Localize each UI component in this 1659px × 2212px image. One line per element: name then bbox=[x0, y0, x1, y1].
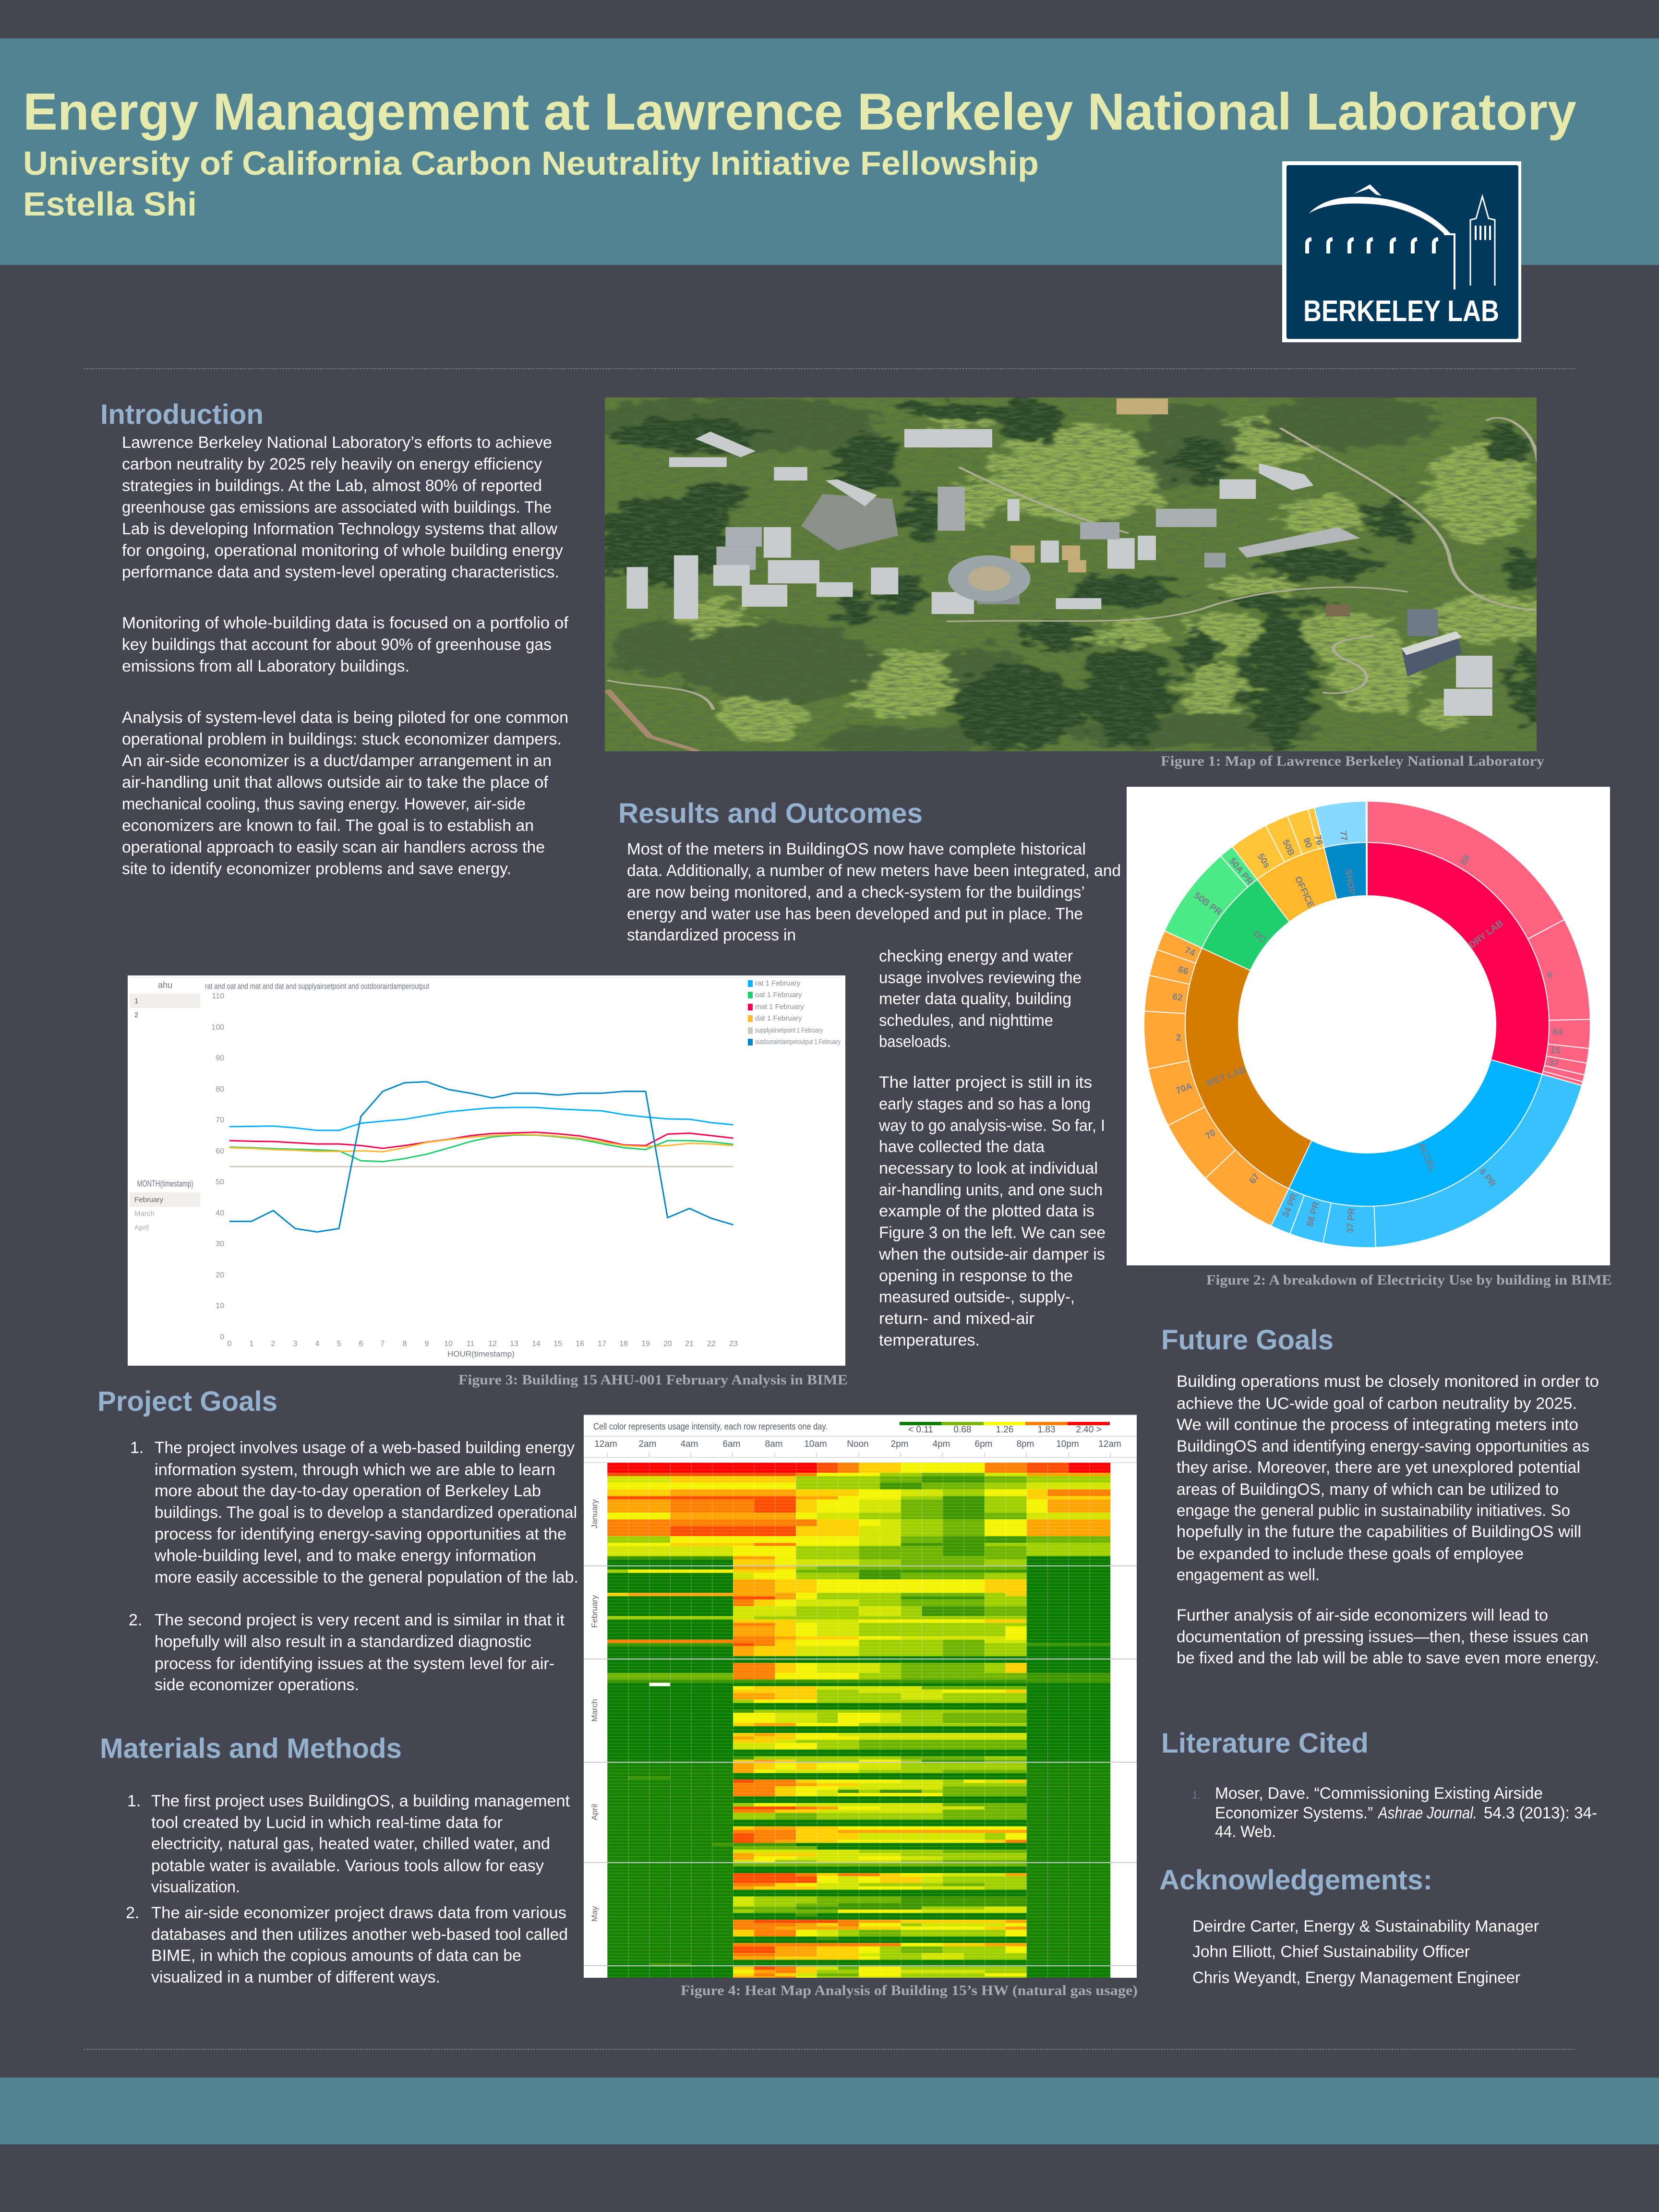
time axis: 4pm bbox=[933, 1439, 950, 1449]
ring labels: 62 bbox=[1172, 992, 1183, 1003]
text block: results continued bbox=[878, 947, 1106, 1349]
legend: mat 1 February bbox=[755, 1003, 804, 1011]
x axis labels: 11 bbox=[467, 1340, 474, 1348]
x axis labels: 23 bbox=[729, 1340, 738, 1348]
text block: results continued: have collected the data bbox=[879, 1138, 1045, 1156]
x axis labels: 19 bbox=[641, 1340, 650, 1348]
month labels: April bbox=[590, 1804, 599, 1820]
text block: introduction: Lawrence Berkeley National Laboratory’s efforts to achieve bbox=[122, 433, 552, 452]
ring labels: 90 bbox=[1301, 837, 1314, 849]
ring labels: 67 bbox=[1248, 1172, 1262, 1186]
citation: 54.3 (2013): 34- bbox=[1484, 1804, 1597, 1822]
text block: results continued: baseloads. bbox=[879, 1033, 951, 1051]
citation: 1. bbox=[1192, 1789, 1201, 1801]
ring labels: 88 PR bbox=[1305, 1201, 1322, 1228]
filter: ahu: 2 bbox=[134, 1011, 138, 1019]
y axis labels: 100 bbox=[211, 1023, 224, 1032]
heading: Acknowledgements: Acknowledgements: bbox=[1159, 1864, 1432, 1896]
legend: rat 1 February bbox=[755, 979, 801, 987]
list: materials and methods: The air-side economizer project draws data from various bbox=[151, 1904, 566, 1922]
x axis labels: 5 bbox=[337, 1340, 341, 1348]
list: project goals: 1. bbox=[130, 1439, 144, 1457]
ring labels: 50B bbox=[1280, 838, 1297, 857]
figure 2: sunburst of electricity use bbox=[1083, 741, 1651, 1308]
list: materials and methods: The first project uses BuildingOS, a building management bbox=[151, 1792, 570, 1810]
ring labels: WET LAB bbox=[1205, 1065, 1247, 1089]
text block: future goals: Further analysis of air-side economizers will lead to bbox=[1177, 1606, 1548, 1624]
list: project goals: more easily accessible to the general population of the lab. bbox=[155, 1568, 578, 1587]
logo: Berkeley Lab bbox=[1282, 161, 1521, 342]
ring labels: 76 bbox=[1312, 834, 1324, 846]
citation bbox=[1192, 1784, 1597, 1841]
list: project goals: process for identifying issues at the system level for air- bbox=[155, 1655, 554, 1673]
text block: introduction: performance data and system-level operating characteristics. bbox=[122, 563, 559, 581]
text block: introduction: operational problem in buildings: stuck economizer dampers. bbox=[122, 730, 562, 748]
text block: results continued: schedules, and nighttime bbox=[879, 1011, 1053, 1030]
text block: future goals: documentation of pressing issues—then, these issues can bbox=[1177, 1628, 1588, 1646]
legend: oat 1 February bbox=[755, 991, 802, 999]
heat map cells bbox=[607, 1463, 1110, 1978]
logo: Berkeley Lab: BERKELEY LAB bbox=[1303, 295, 1499, 328]
text block: results continued: meter data quality, building bbox=[879, 990, 1071, 1008]
list: materials and methods: electricity, natural gas, heated water, chilled water, and bbox=[151, 1835, 550, 1853]
text block: introduction: site to identify economizer problems and save energy. bbox=[122, 860, 511, 878]
text block: results continued: when the outside-air damper is bbox=[878, 1245, 1105, 1263]
text block: introduction: economizers are known to fail. The goal is to establish an bbox=[122, 817, 534, 835]
caption: figure 2: Figure 2: A breakdown of Electricity Use by building in BIME bbox=[1206, 1272, 1612, 1288]
time axis bbox=[594, 1439, 1121, 1449]
ring labels: 77 bbox=[1337, 830, 1349, 842]
text block: future goals: areas of BuildingOS, many of which can be utilized to bbox=[1177, 1480, 1559, 1499]
ring labels: SHOP bbox=[1343, 868, 1357, 895]
list: materials and methods: 1. bbox=[127, 1792, 141, 1810]
y axis labels: 60 bbox=[216, 1147, 224, 1155]
y axis labels bbox=[211, 992, 224, 1341]
data lines bbox=[229, 1082, 733, 1232]
caption: figure 1: Figure 1: Map of Lawrence Berkeley National Laboratory bbox=[1161, 753, 1544, 769]
list: materials and methods: visualized in a number of different ways. bbox=[151, 1968, 440, 1986]
outer ring: buildings bbox=[1083, 741, 1651, 1308]
top banner bbox=[0, 38, 1659, 265]
list: project goals: buildings. The goal is to develop a standardized operational bbox=[155, 1503, 577, 1522]
text block: future goals bbox=[1177, 1372, 1599, 1667]
text block: results continued: early stages and so has a long bbox=[879, 1095, 1091, 1113]
text block: results: data. Additionally, a number of new meters have been integrated, and bbox=[627, 862, 1121, 880]
heading: Project Goals: Project Goals bbox=[97, 1386, 277, 1417]
text block: results continued: Figure 3 on the left. We can see bbox=[879, 1224, 1106, 1242]
list: project goals: The second project is very recent and is similar in that it bbox=[155, 1611, 565, 1629]
figure 3: line chart bbox=[128, 975, 845, 1366]
ring labels: 34 PR bbox=[1280, 1192, 1299, 1219]
heat map legend bbox=[900, 1422, 1110, 1435]
time axis: 6am bbox=[723, 1439, 740, 1449]
text block: results continued: opening in response to the bbox=[879, 1267, 1073, 1285]
ring labels: 37 PR bbox=[1345, 1207, 1357, 1234]
time axis: 10pm bbox=[1056, 1439, 1079, 1449]
filter: month: April bbox=[134, 1224, 149, 1232]
title: Energy Management at Lawrence Berkeley National Laboratory bbox=[23, 83, 1576, 141]
time axis: 8am bbox=[765, 1439, 782, 1449]
ring labels: 50B PR bbox=[1192, 890, 1224, 918]
x axis labels: 12 bbox=[488, 1340, 497, 1348]
text block: future goals: be expanded to include these goals of employee bbox=[1177, 1545, 1524, 1563]
y axis labels: 40 bbox=[216, 1209, 224, 1217]
x axis labels: 21 bbox=[685, 1340, 694, 1348]
list: project goals: process for identifying energy-saving opportunities at the bbox=[155, 1525, 566, 1543]
filter: month bbox=[130, 1179, 200, 1232]
legend: dat 1 February bbox=[755, 1014, 802, 1022]
x axis labels: 10 bbox=[444, 1340, 453, 1348]
x axis labels bbox=[228, 1340, 738, 1358]
ring labels: 70A bbox=[1175, 1081, 1194, 1096]
text block: results continued: temperatures. bbox=[879, 1331, 980, 1349]
text block: introduction: carbon neutrality by 2025 rely heavily on energy efficiency bbox=[122, 455, 542, 473]
text block: results continued: necessary to look at individual bbox=[879, 1159, 1098, 1178]
y axis labels: 70 bbox=[216, 1116, 224, 1124]
heading: Results and Outcomes: Results and Outcomes bbox=[618, 798, 923, 829]
text block: results continued: usage involves reviewing the bbox=[879, 969, 1082, 987]
filter: month: March bbox=[134, 1210, 155, 1218]
ring labels: 37 bbox=[1548, 1057, 1560, 1069]
text block: introduction: strategies in buildings. At the Lab, almost 80% of reported bbox=[122, 477, 542, 495]
text block: introduction: greenhouse gas emissions are associated with buildings. The bbox=[122, 498, 552, 517]
list: project goals: information system, through which we are able to learn bbox=[155, 1461, 555, 1479]
x axis labels: 17 bbox=[598, 1340, 606, 1348]
month labels: May bbox=[590, 1906, 599, 1922]
author: Estella Shi bbox=[23, 185, 197, 223]
x axis labels: 22 bbox=[707, 1340, 716, 1348]
text block: results continued: The latter project is still in its bbox=[879, 1073, 1092, 1092]
text block: acknowledgements: Chris Weyandt, Energy Management Engineer bbox=[1192, 1969, 1520, 1987]
ring labels: DRY LAB bbox=[1467, 918, 1505, 950]
legend bbox=[748, 979, 841, 1046]
list: project goals bbox=[129, 1439, 578, 1694]
ring labels: 84 bbox=[1552, 1027, 1563, 1037]
ring labels: 50s bbox=[1255, 852, 1272, 870]
time axis: 4am bbox=[681, 1439, 698, 1449]
ring labels: 70 bbox=[1203, 1128, 1217, 1142]
text block: results continued: checking energy and water bbox=[879, 947, 1073, 965]
list: materials and methods: 2. bbox=[126, 1904, 139, 1922]
text block: results: standardized process in bbox=[627, 926, 796, 944]
x axis labels: 4 bbox=[315, 1340, 320, 1348]
x axis labels: 2 bbox=[271, 1340, 276, 1348]
text block: future goals: engage the general public in sustainability initiatives. So bbox=[1177, 1502, 1570, 1520]
x axis labels: 20 bbox=[663, 1340, 672, 1348]
heat map legend: < 0.11 bbox=[908, 1425, 933, 1435]
time axis: 12am bbox=[1098, 1439, 1121, 1449]
text block: introduction: for ongoing, operational monitoring of whole building energy bbox=[122, 541, 563, 560]
time axis: 8pm bbox=[1017, 1439, 1034, 1449]
text block: future goals: they arise. Moreover, there are yet unexplored potential bbox=[1177, 1458, 1580, 1477]
citation: Moser, Dave. “Commissioning Existing Airside bbox=[1215, 1784, 1543, 1803]
x axis labels: 13 bbox=[510, 1340, 518, 1348]
list: materials and methods: tool created by Lucid in which real-time data for bbox=[151, 1814, 503, 1832]
month labels: January bbox=[590, 1499, 599, 1528]
heat map caption: Cell color represents usage intensity, each row represents one day. bbox=[593, 1422, 828, 1432]
text block: future goals: We will continue the process of integrating meters into bbox=[1177, 1416, 1578, 1434]
text block: acknowledgements: John Elliott, Chief Sustainability Officer bbox=[1192, 1943, 1470, 1961]
text block: introduction: key buildings that account for about 90% of greenhouse gas bbox=[122, 636, 552, 654]
list: materials and methods: visualization. bbox=[151, 1878, 240, 1896]
text block: acknowledgements bbox=[1192, 1917, 1539, 1987]
ring labels: OFFICE bbox=[1293, 875, 1316, 909]
chart title: rat and oat and mat and dat and supplyairsetpoint and outdoorairdamperoutput bbox=[205, 982, 429, 991]
filter: ahu: 1 bbox=[134, 997, 138, 1005]
x axis labels: HOUR(timestamp) bbox=[447, 1349, 515, 1358]
time axis: 10am bbox=[804, 1439, 827, 1449]
list: project goals: side economizer operations. bbox=[155, 1676, 359, 1694]
text block: results continued: example of the plotted data is bbox=[879, 1202, 1094, 1220]
x axis labels: 8 bbox=[403, 1340, 407, 1348]
ring labels: 88 bbox=[1459, 853, 1473, 867]
heat map legend: 2.40 > bbox=[1076, 1425, 1102, 1435]
bottom banner bbox=[0, 2078, 1659, 2144]
y axis labels: 80 bbox=[216, 1085, 224, 1094]
month labels bbox=[590, 1499, 599, 1922]
y axis labels: 10 bbox=[216, 1302, 224, 1310]
text block: results: Most of the meters in BuildingOS now have complete historical bbox=[627, 840, 1086, 858]
caption: figure 3: Figure 3: Building 15 AHU-001 February Analysis in BIME bbox=[458, 1372, 848, 1388]
text block: introduction: operational approach to easily scan air handlers across the bbox=[122, 838, 545, 856]
y axis labels: 50 bbox=[216, 1178, 224, 1186]
time axis: 12am bbox=[594, 1439, 617, 1449]
x axis labels: 3 bbox=[293, 1340, 298, 1348]
y axis labels: 20 bbox=[216, 1271, 224, 1279]
text block: introduction: mechanical cooling, thus saving energy. However, air-side bbox=[122, 795, 526, 813]
figure 1: aerial photo of the laboratory bbox=[589, 394, 1553, 756]
ring labels: 15 bbox=[1550, 1045, 1562, 1057]
list: project goals: whole-building level, and to make energy information bbox=[154, 1547, 536, 1565]
x axis labels: 6 bbox=[359, 1340, 363, 1348]
time axis: Noon bbox=[847, 1439, 869, 1449]
heading: Literature Cited: Literature Cited bbox=[1161, 1728, 1369, 1759]
text block: future goals: engagement as well. bbox=[1177, 1566, 1320, 1584]
text block: results continued: air-handling units, and one such bbox=[879, 1181, 1103, 1199]
heat map legend: 1.26 bbox=[996, 1425, 1013, 1435]
month labels: February bbox=[590, 1595, 599, 1628]
text block: future goals: Building operations must be closely monitored in order to bbox=[1177, 1372, 1599, 1391]
text block: future goals: BuildingOS and identifying energy-saving opportunities as bbox=[1177, 1437, 1589, 1455]
list: materials and methods: BIME, in which the copious amounts of data can be bbox=[151, 1947, 521, 1965]
y axis labels: 90 bbox=[216, 1054, 224, 1062]
month labels: March bbox=[590, 1699, 599, 1722]
text block: results: energy and water use has been developed and put in place. The bbox=[627, 905, 1083, 923]
text block: results continued: return- and mixed-air bbox=[879, 1310, 1034, 1328]
x axis labels: 15 bbox=[553, 1340, 562, 1348]
y axis labels: 30 bbox=[216, 1240, 224, 1248]
text block: introduction: Lab is developing Information Technology systems that allow bbox=[122, 520, 557, 538]
heading: Materials and Methods: Materials and Methods bbox=[100, 1733, 402, 1764]
ring labels: 50A PR bbox=[1227, 856, 1255, 887]
legend: supplyairsetpoint 1 February bbox=[755, 1026, 823, 1034]
citation: 44. Web. bbox=[1215, 1823, 1276, 1841]
text block: introduction: Monitoring of whole-building data is focused on a portfolio of bbox=[122, 614, 569, 632]
citation: Ashrae Journal. bbox=[1377, 1804, 1477, 1822]
filter: month: February bbox=[134, 1196, 164, 1204]
heat map legend: 1.83 bbox=[1038, 1425, 1055, 1435]
x axis labels: 1 bbox=[250, 1340, 254, 1348]
subtitle: University of California Carbon Neutrality Initiative Fellowship bbox=[23, 144, 1039, 182]
time axis: 2pm bbox=[891, 1439, 908, 1449]
list: materials and methods: potable water is available. Various tools allow for easy bbox=[151, 1857, 544, 1875]
filter: ahu: ahu bbox=[158, 980, 172, 990]
text block: introduction: air-handling unit that allows outside air to take the place of bbox=[122, 773, 549, 792]
text block: introduction: An air-side economizer is a duct/damper arrangement in an bbox=[122, 752, 552, 770]
time axis: 2am bbox=[639, 1439, 656, 1449]
figure 4: heat map bbox=[584, 1415, 1137, 1980]
y axis labels: 110 bbox=[212, 992, 224, 1000]
ring labels: DC bbox=[1251, 929, 1268, 945]
text block: introduction bbox=[122, 433, 569, 878]
x axis labels: 18 bbox=[619, 1340, 628, 1348]
ring labels: 2 bbox=[1176, 1033, 1181, 1043]
ring labels: 6 PR bbox=[1477, 1167, 1498, 1189]
text block: results continued: way to go analysis-wise. So far, I bbox=[878, 1117, 1105, 1135]
text block: acknowledgements: Deirdre Carter, Energy & Sustainability Manager bbox=[1192, 1917, 1539, 1936]
text block: introduction: Analysis of system-level data is being piloted for one common bbox=[122, 709, 568, 727]
time axis: 6pm bbox=[975, 1439, 992, 1449]
list: project goals: The project involves usage of a web-based building energy bbox=[155, 1439, 575, 1457]
x axis labels: 7 bbox=[381, 1340, 385, 1348]
heat map legend: 0.68 bbox=[954, 1425, 971, 1435]
text block: results continued: measured outside-, supply-, bbox=[879, 1288, 1075, 1306]
heading: Future Goals: Future Goals bbox=[1161, 1324, 1334, 1356]
text block: results bbox=[627, 840, 1121, 944]
list: project goals: 2. bbox=[129, 1611, 142, 1629]
text block: introduction: emissions from all Laboratory buildings. bbox=[122, 657, 409, 675]
inner ring: building types bbox=[1149, 806, 1585, 1242]
x axis labels: 16 bbox=[576, 1340, 584, 1348]
y axis labels: 0 bbox=[220, 1333, 224, 1341]
ring labels: 66 bbox=[1177, 964, 1190, 977]
heading: Introduction: Introduction bbox=[100, 399, 264, 430]
filter: month: MONTH(timestamp) bbox=[137, 1179, 193, 1189]
x axis labels: 14 bbox=[532, 1340, 541, 1348]
text block: results: are now being monitored, and a check-system for the buildings’ bbox=[627, 883, 1085, 902]
text block: future goals: achieve the UC-wide goal of carbon neutrality by 2025. bbox=[1177, 1395, 1577, 1413]
ring labels: 6 bbox=[1546, 970, 1553, 981]
list: project goals: hopefully will also result in a standardized diagnostic bbox=[155, 1633, 531, 1651]
ring labels bbox=[1172, 830, 1563, 1234]
x axis labels: 0 bbox=[228, 1340, 232, 1348]
text block: future goals: hopefully in the future the capabilities of BuildingOS will bbox=[1177, 1523, 1581, 1541]
x axis labels: 9 bbox=[425, 1340, 429, 1348]
legend: outdoorairdamperoutput 1 February bbox=[755, 1038, 841, 1046]
caption: figure 4: Figure 4: Heat Map Analysis of Building 15’s HW (natural gas usage) bbox=[681, 1983, 1138, 1998]
list: materials and methods: databases and then utilizes another web-based tool called bbox=[151, 1925, 568, 1944]
text block: future goals: be fixed and the lab will be able to save even more energy. bbox=[1177, 1649, 1599, 1667]
ring labels: 74 bbox=[1183, 945, 1197, 959]
citation: Economizer Systems.” bbox=[1215, 1804, 1373, 1822]
list: materials and methods bbox=[126, 1792, 570, 1986]
filter: ahu bbox=[130, 980, 200, 1019]
list: project goals: more about the day-to-day operation of Berkeley Lab bbox=[155, 1482, 541, 1500]
ring labels: ACCEL bbox=[1416, 1141, 1438, 1174]
